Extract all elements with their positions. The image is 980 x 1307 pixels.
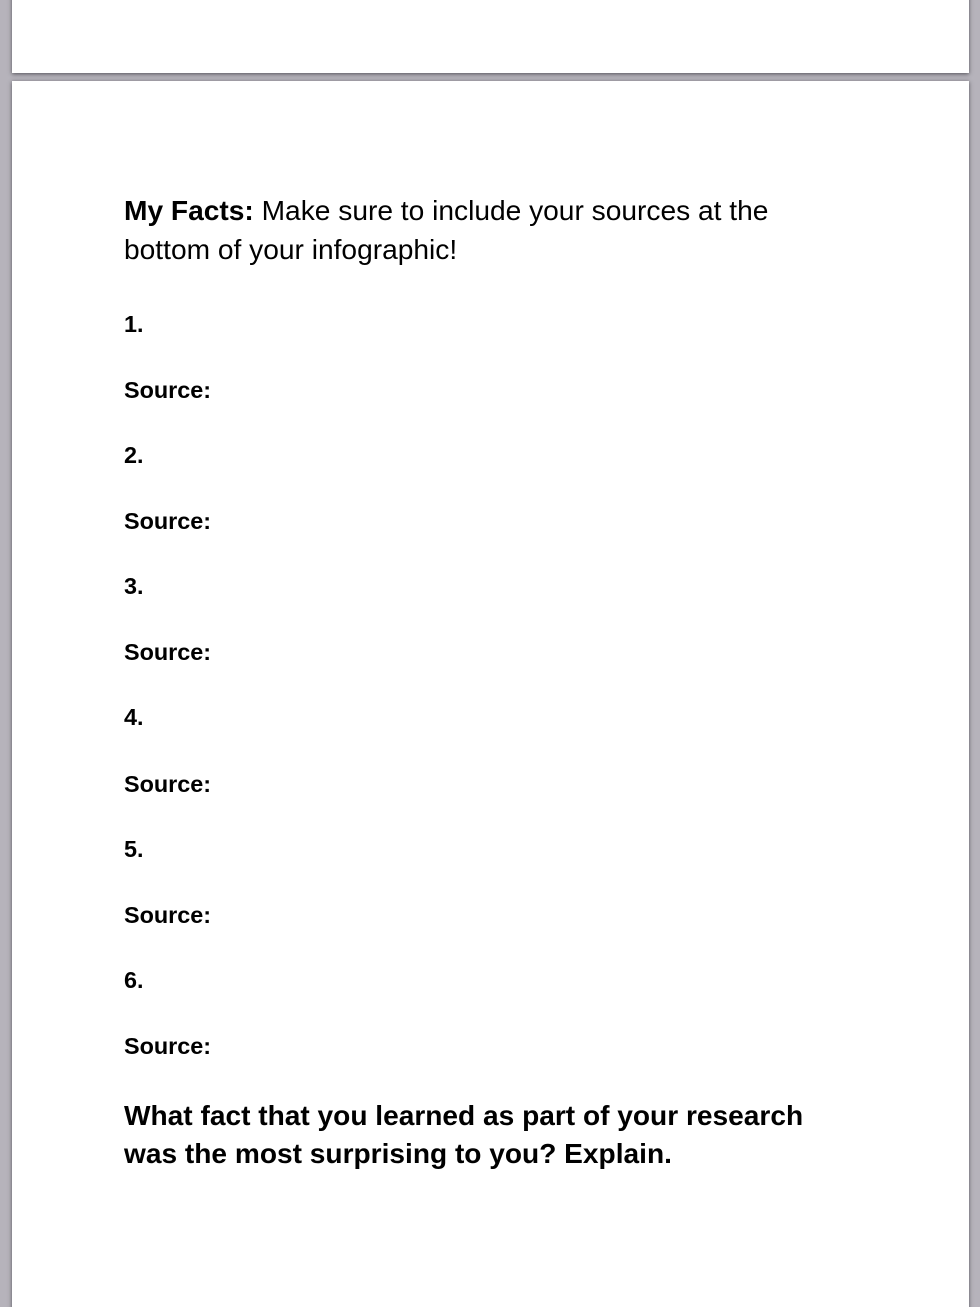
question: line 1: What fact that you learned as part of your research bbox=[124, 1100, 803, 1131]
question: line 2: was the most surprising to you? Explain. bbox=[124, 1138, 672, 1169]
text: source 6: Source: bbox=[124, 1033, 211, 1059]
text: fact 3: 3. bbox=[124, 573, 144, 599]
panel: top page fragment bbox=[12, 0, 969, 73]
heading: my facts line 2: bottom of your infographic! bbox=[124, 234, 457, 265]
text: fact 2: 2. bbox=[124, 442, 144, 468]
text: source 4: Source: bbox=[124, 771, 211, 797]
text: source 1: Source: bbox=[124, 377, 211, 403]
text: fact 4: 4. bbox=[124, 704, 144, 730]
text: source 3: Source: bbox=[124, 639, 211, 665]
text: fact 5: 5. bbox=[124, 836, 144, 862]
text: source 2: Source: bbox=[124, 508, 211, 534]
text: fact 6: 6. bbox=[124, 967, 144, 993]
text: fact 1: 1. bbox=[124, 311, 144, 337]
heading: my facts line 1: My Facts: Make sure to include your sources at the bbox=[124, 195, 768, 226]
text: source 5: Source: bbox=[124, 902, 211, 928]
